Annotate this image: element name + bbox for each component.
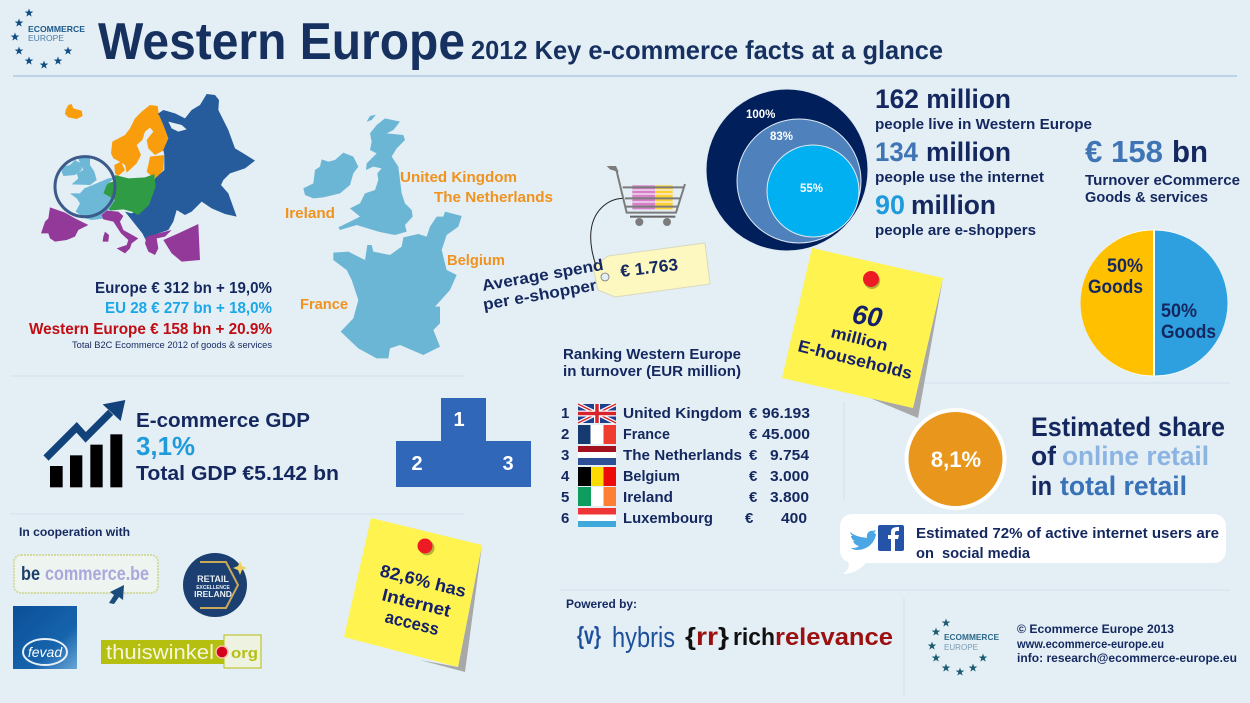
flag: The Netherlands — [578, 446, 616, 465]
sticky note: 60 million E-households: E-households — [796, 336, 914, 383]
heading: estimated share: online retail — [1062, 441, 1209, 471]
population figures: 90 — [875, 190, 905, 220]
ranking table: 5 — [561, 489, 569, 506]
turnover figure: € 158 — [1085, 134, 1163, 169]
logo: footer Ecommerce Europe — [928, 618, 999, 676]
nested circles: population: 100% — [746, 109, 775, 121]
heading: estimated share: total retail — [1060, 471, 1187, 501]
stats: Europe turnover — [29, 280, 272, 351]
ranking table: 2 — [561, 426, 569, 443]
GDP figures: E-commerce GDP — [136, 410, 310, 432]
country labels — [285, 169, 553, 313]
logo: thuiswinkel.org: org — [231, 645, 258, 662]
logo: richrelevance: {rr} — [685, 623, 729, 651]
logo: becommerce.be — [14, 555, 158, 604]
price tag: average spend: Average spend — [481, 257, 605, 295]
turnover figure: Goods & services — [1085, 189, 1208, 206]
ranking table: United Kingdom — [623, 405, 742, 422]
footer contact text: www.ecommerce-europe.eu — [1016, 639, 1164, 651]
ranking table: 1 — [561, 405, 569, 422]
pie chart: goods and services — [1080, 230, 1228, 376]
ranking table: France — [623, 426, 670, 443]
logo: becommerce.be: be — [21, 564, 40, 585]
population figures: million — [911, 190, 996, 220]
pie chart: goods and services: Goods — [1161, 322, 1216, 343]
footer contact text — [1016, 624, 1237, 665]
population figures: people live in Western Europe — [875, 116, 1092, 133]
flag: Luxembourg — [578, 508, 616, 527]
heading: estimated share: of — [1031, 441, 1057, 471]
pie chart: goods and services: 50% — [1107, 256, 1143, 277]
ranking table: 3.800 — [770, 489, 809, 506]
title: Western Europe — [98, 13, 465, 71]
speech bubble: social media: Estimated 72% of active internet users are — [916, 525, 1219, 542]
logo: richrelevance: relevance — [775, 624, 893, 651]
ranking table: Belgium — [623, 468, 680, 485]
sticky note: 60 million E-households: 60 — [850, 299, 884, 333]
ranking table: 9.754 — [770, 447, 810, 464]
logo: richrelevance — [685, 623, 893, 651]
logo: Retail Excellence Ireland: RETAIL — [197, 574, 229, 584]
turnover figure: Turnover eCommerce — [1085, 172, 1240, 189]
sticky note: internet access: access — [383, 606, 441, 639]
nested circles: population — [706, 89, 868, 251]
price tag: average spend: per e-shopper — [482, 277, 598, 314]
sticky note: 60 million E-households — [782, 248, 943, 418]
price tag: average spend: € 1.763 — [619, 255, 679, 281]
sticky note: internet access: Internet — [380, 584, 453, 621]
logo: Ecommerce Europe — [11, 8, 85, 69]
logo: footer Ecommerce Europe: EUROPE — [944, 642, 978, 652]
logo: hybris: hybris — [612, 622, 675, 654]
footer contact text: info: research@ecommerce-europe.eu — [1017, 653, 1237, 665]
ranking table: The Netherlands — [623, 447, 742, 464]
cooperation heading: In cooperation with — [19, 527, 130, 539]
map: Western Europe countries — [303, 115, 462, 358]
GDP figures — [136, 410, 339, 485]
footer contact text: © Ecommerce Europe 2013 — [1017, 624, 1174, 636]
logo: Ecommerce Europe: ECOMMERCE — [28, 24, 85, 34]
heading: estimated share: in — [1031, 471, 1052, 501]
price tag: average spend — [481, 243, 710, 314]
podium: 1 — [453, 409, 465, 431]
callout: online retail share circle: 8,1% — [931, 447, 981, 472]
logo: footer Ecommerce Europe: ECOMMERCE — [944, 632, 999, 642]
nested circles: population: 55% — [800, 183, 823, 195]
country labels: Ireland — [285, 205, 335, 222]
icon: facebook — [878, 525, 904, 551]
country labels: The Netherlands — [434, 189, 553, 206]
speech bubble: social media — [840, 514, 1226, 574]
country labels: France — [300, 296, 348, 313]
population figures: million — [926, 137, 1011, 167]
flag: Ireland — [578, 487, 616, 506]
turnover figure — [1085, 134, 1240, 206]
pie chart: goods and services: 50% — [1161, 301, 1197, 322]
population figures: people are e-shoppers — [875, 222, 1036, 239]
ranking table: 3.000 — [770, 468, 809, 485]
logo: fevad — [13, 606, 77, 669]
GDP figures: Total GDP €5.142 bn — [136, 463, 339, 485]
ranking table — [561, 404, 810, 527]
ranking table: € — [749, 405, 758, 422]
logo: fevad: fevad — [28, 644, 63, 660]
flag: United Kingdom — [578, 404, 616, 423]
ranking table: 4 — [561, 468, 570, 485]
sticky note: internet access — [344, 518, 482, 672]
logo: Retail Excellence Ireland: EXCELLENCE — [196, 585, 230, 591]
logo: richrelevance: rich — [733, 624, 775, 651]
icon: shopping cart with tag string — [591, 166, 685, 273]
population figures: 162 million — [875, 84, 1011, 114]
icon: twitter — [850, 530, 876, 550]
ranking table: Luxembourg — [623, 510, 713, 527]
ranking heading: in turnover (EUR million) — [563, 363, 741, 380]
ranking table: 6 — [561, 510, 569, 527]
logo: hybris: {v} — [577, 622, 601, 650]
logo: Retail Excellence Ireland — [183, 553, 247, 617]
GDP figures: 3,1% — [136, 431, 195, 461]
population figures: people use the internet — [875, 169, 1044, 186]
nested circles: population: 83% — [770, 131, 793, 143]
flag: France — [578, 425, 616, 444]
callout: online retail share circle — [906, 410, 1004, 508]
logo: hybris — [577, 622, 675, 654]
map: Europe — [41, 94, 255, 262]
podium: 2 — [411, 453, 423, 475]
logo: Retail Excellence Ireland: IRELAND — [194, 589, 232, 599]
podium — [396, 398, 531, 487]
ranking heading — [563, 346, 741, 380]
ranking table: € — [749, 489, 758, 506]
country labels: Belgium — [447, 252, 505, 269]
population figures — [875, 84, 1092, 239]
ranking table: € — [745, 510, 754, 527]
turnover figure: bn — [1172, 134, 1208, 169]
logo: becommerce.be: commerce.be — [45, 564, 149, 585]
sticky note: 60 million E-households: million — [829, 324, 889, 355]
subtitle: 2012 Key e-commerce facts at a glance — [471, 35, 943, 65]
stats: Europe turnover: Europe € 312 bn + 19,0% — [95, 280, 272, 297]
powered by heading: Powered by: — [566, 599, 637, 611]
pie chart: goods and services: Goods — [1088, 277, 1143, 298]
country labels: United Kingdom — [400, 169, 517, 186]
speech bubble: social media: on social media — [916, 545, 1031, 562]
ranking table: 3 — [561, 447, 569, 464]
ranking table: 96.193 — [762, 405, 810, 422]
ranking table: 45.000 — [762, 426, 810, 443]
ranking table: € — [749, 426, 758, 443]
flag: Belgium — [578, 467, 616, 486]
heading: estimated share — [1031, 412, 1225, 501]
heading: estimated share: Estimated share — [1031, 412, 1225, 442]
logo: Ecommerce Europe: EUROPE — [28, 33, 64, 43]
stats: Europe turnover: Western Europe € 158 bn + 20.9% — [29, 321, 272, 338]
ranking heading: Ranking Western Europe — [563, 346, 741, 363]
sticky note: internet access: 82,6% has — [378, 560, 469, 601]
stats: Europe turnover: EU 28 € 277 bn + 18,0% — [105, 300, 272, 317]
ranking table: € — [749, 468, 758, 485]
ranking table: Ireland — [623, 489, 673, 506]
ranking table: 400 — [781, 510, 807, 527]
logo: thuiswinkel.org — [101, 635, 261, 668]
stats: Europe turnover: Total B2C Ecommerce 2012 of goods & services — [72, 340, 272, 351]
podium: 3 — [502, 453, 514, 475]
logo: thuiswinkel.org: thuiswinkel — [106, 642, 214, 664]
icon: growth chart — [46, 400, 125, 487]
population figures: 134 — [875, 137, 918, 167]
ranking table: € — [749, 447, 758, 464]
